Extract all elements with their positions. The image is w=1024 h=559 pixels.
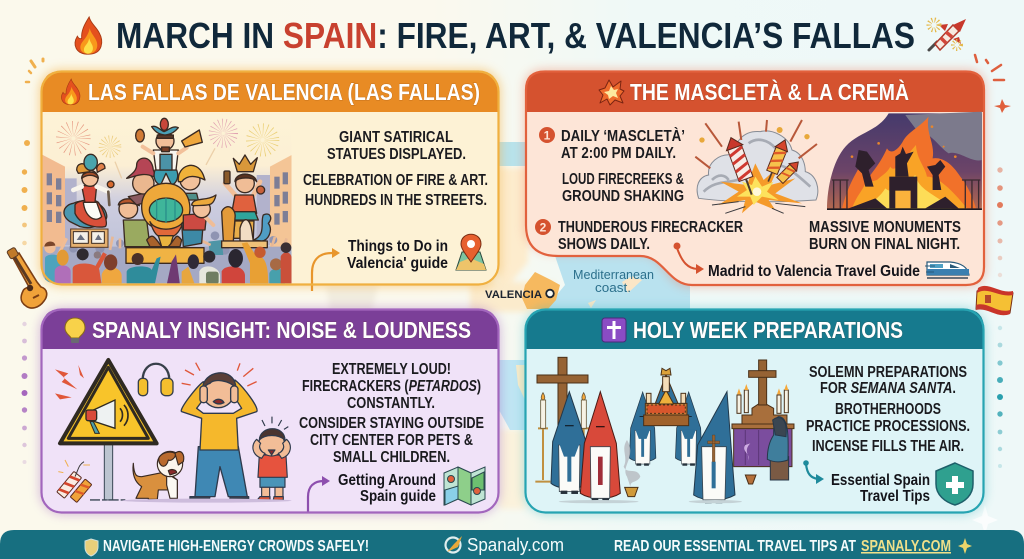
guide link: Things to Do in Valencia: Things to Do in [348,238,448,255]
title text: MARCH IN SPAIN: FIRE, ART, & VALENCIA’S FALLAS [116,15,915,56]
guide link: Things to Do in Valencia: Valencia' guide [347,255,448,272]
header text: THE MASCLETÀ & LA CREMÀ [630,78,909,105]
lady figure with jester cap [64,154,114,228]
text: extremely loud: EXTREMELY LOUD! [332,361,451,378]
footer: read more call to action: READ OUR ESSENTIAL TRAVEL TIPS AT [614,538,856,555]
panel: Holy Week Preparations [523,307,986,515]
text: massive monuments [809,219,961,253]
text: daily mascletà: DAILY ‘MASCLETÀ’ [561,126,685,145]
panel header: Mascletà [526,71,984,112]
panel: The Mascletà & La Cremà [524,69,986,287]
altar with cross [732,360,794,467]
icon: explosion [599,80,624,105]
icon: title rocket [929,19,966,50]
guide link: Getting Around Spain: Spain guide [360,488,436,505]
illustration: Fallas parade float with crowd [42,115,292,285]
icon: header flame [61,79,80,105]
side booth [71,229,108,247]
icon: folded map [444,467,485,505]
candles [535,393,589,482]
carried statue platform [644,368,689,426]
arrow to Getting Around guide [308,476,330,512]
text: Las Fallas description: HUNDREDS IN THE STREETS. [305,192,487,209]
text: Holy Week description: PRACTICE PROCESSIONS. [806,418,970,435]
text: extremely loud [299,361,484,466]
panel: Las Fallas de Valencia [39,69,501,291]
panel header: Holy Week [526,309,984,349]
text: Las Fallas description: CELEBRATION OF FIRE & ART. [303,172,488,189]
incense right [744,443,756,484]
number badge 1 [539,127,555,143]
platform bearers [629,392,656,466]
text: Holy Week description: BROTHERHOODS [835,401,941,418]
guide link: Madrid to Valencia: Madrid to Valencia Travel Guide [708,263,920,280]
guide link: Getting Around Spain [338,467,485,505]
panel: Spanaly Insight noise and loudness [39,307,501,515]
label: Valencia marker on map: VALENCIA [485,289,542,301]
text: extremely loud: CONSTANTLY. [347,395,435,412]
text: massive monuments: BURN ON FINAL NIGHT. [809,236,960,253]
number badge 2: 2 [540,220,547,234]
label: Mediterranean coast: Mediterranean [573,268,654,282]
label: Mediterranean coast: coast. [595,281,631,295]
icon: Spanish flag [976,286,1013,315]
text: Las Fallas description: STATUES DISPLAYED. [327,146,466,163]
text: Holy Week description: FOR SEMANA SANTA. [820,380,956,397]
warning sign [60,360,157,500]
background map of Spain and the Mediterranean [326,142,690,509]
text: firecracker shows: THUNDEROUS FIRECRACKER [558,219,743,236]
footer: safety message: NAVIGATE HIGH-ENERGY CROWDS SAFELY! [103,538,369,555]
guide link: Things to Do in Valencia [347,234,486,272]
footer banner [0,530,1024,559]
number badge 2 [535,219,551,235]
buildings [42,154,292,248]
queen figure [224,155,265,238]
icon: shield with cross [936,463,973,505]
illustration: burning monuments [827,112,982,210]
figure: blonde face [178,165,205,200]
header text: HOLY WEEK PREPARATIONS [633,317,903,343]
icon: guitar [7,247,47,308]
icon: purple cross [602,318,626,342]
icon: train [925,262,969,278]
illustration: noise warning with family and dog [55,360,292,503]
illustration: Holy Week procession [535,357,794,503]
icon: title flame [75,17,102,54]
guide link: Getting Around Spain: Getting Around [338,472,436,489]
side figures orange and blue [222,207,271,241]
crowd [44,238,292,285]
panel header: Spanaly Insight [42,309,498,349]
text: daily mascletà [561,126,685,205]
text: daily mascletà: AT 2:00 PM DAILY. [561,145,676,162]
text: firecracker shows [558,219,743,253]
text: extremely loud: CITY CENTER FOR PETS & [310,432,473,449]
text: Holy Week description: INCENSE FILLS THE AIR. [812,438,964,455]
headphones [138,364,173,396]
title [75,15,966,56]
label: Mediterranean coast [573,268,654,295]
praying woman [767,417,789,480]
text: daily mascletà: GROUND SHAKING [562,188,684,205]
figure: big hat man [127,158,160,205]
arrow to Things to Do guide [312,248,340,291]
text: Holy Week description [806,364,970,455]
text: extremely loud: CONSIDER STAYING OUTSIDE [299,415,484,432]
header text: LAS FALLAS DE VALENCIA (LAS FALLAS) [88,79,480,105]
background crowd [42,231,292,285]
fireworks [65,126,271,178]
number badge 1: 1 [544,128,551,142]
header text: SPANALY INSIGHT: NOISE & LOUDNESS [92,317,471,343]
figure: left lower face [118,199,150,247]
icon: light bulb [65,318,85,343]
large crossed nazarenos [551,392,588,494]
figure: muscular man [182,195,216,247]
text: extremely loud: FIRECRACKERS (PETARDOS) [302,378,481,395]
text: Las Fallas description: GIANT SATIRICAL [339,129,453,146]
man covering ears [181,363,257,499]
text: Las Fallas description [303,129,488,209]
float platforms [126,241,267,263]
text: Holy Week description: SOLEMN PREPARATIONS [809,364,967,381]
child covering ears [253,417,290,500]
guide link: Essential Spain Travel Tips [831,463,973,505]
panel header: Las Fallas [42,71,498,112]
text: massive monuments: MASSIVE MONUMENTS [809,219,961,236]
arrow to Madrid guide [674,242,704,274]
footer: read more call to action: SPANALY.COM [861,538,951,555]
icon: map pin [456,234,486,270]
arrow to Essential Spain guide [803,460,824,484]
guide link: Essential Spain Travel Tips: Travel Tips [860,488,930,505]
guide link: Essential Spain Travel Tips: Essential Spain [831,472,930,489]
lightning bolts [55,365,84,399]
large cross [537,357,588,444]
incense left [624,440,640,497]
firecrackers [57,460,92,502]
top jester figure [136,118,202,185]
dog [133,451,184,499]
footer: Spanaly logo: Spanaly.com [467,535,564,555]
central shell falla [142,183,190,247]
text: firecracker shows: SHOWS DAILY. [558,236,650,253]
text: extremely loud: SMALL CHILDREN. [333,449,450,466]
illustration: firecracker explosion [695,120,818,213]
text: daily mascletà: LOUD FIRECREEKS & [562,171,684,188]
